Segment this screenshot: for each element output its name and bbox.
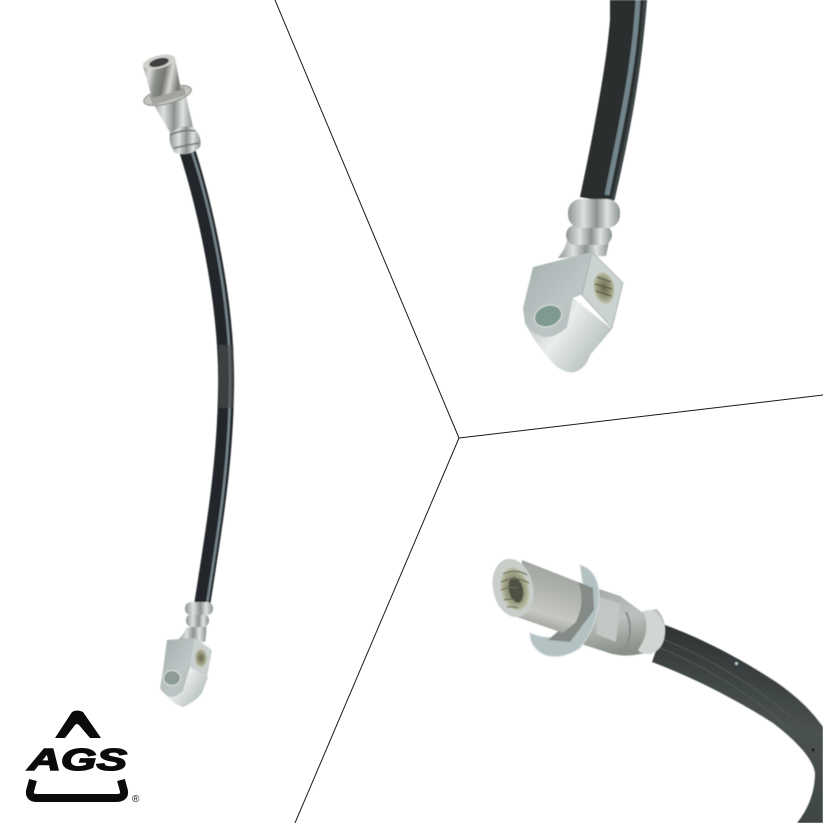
bottom banjo fitting (160, 602, 213, 707)
fitting collars and neck (558, 199, 620, 258)
logo chevron (55, 710, 101, 738)
washer (530, 565, 599, 656)
banjo block (523, 252, 623, 372)
hex nut (548, 582, 594, 642)
hose body (187, 150, 230, 612)
hose close-up bottom (652, 625, 823, 823)
logo wordmark: AGS (27, 742, 127, 777)
panel: banjo fitting close-up (523, 0, 647, 372)
logo tray (30, 780, 124, 798)
panel: full brake hose (141, 52, 230, 707)
top flange fitting (141, 52, 201, 154)
hose close-up top (580, 0, 647, 203)
threaded cylinder (487, 555, 582, 633)
logo: AGS (27, 710, 140, 805)
registered mark: ® (132, 794, 140, 805)
divider lines between panels (275, 0, 823, 823)
panel: flange fitting close-up (487, 555, 823, 823)
crimp body (575, 588, 665, 656)
